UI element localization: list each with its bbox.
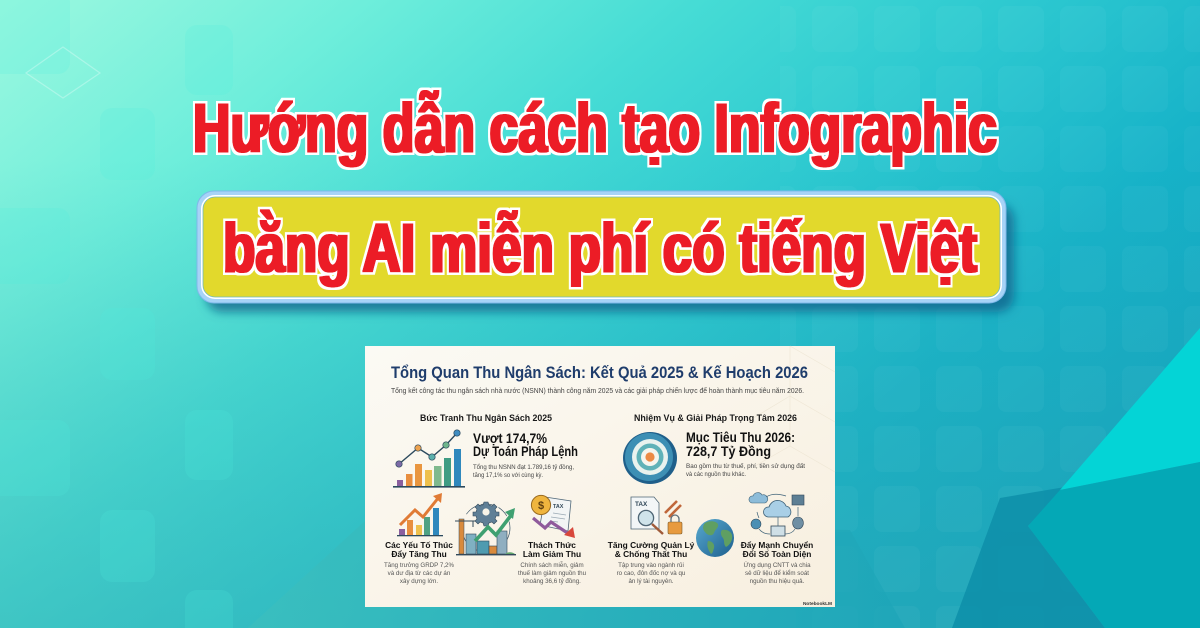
icon: tax document with falling arrow: $ [538, 500, 544, 512]
text block: tighter management [608, 540, 695, 585]
panel subtitle: Tổng kết công tác thu ngân sách nhà nước (NSNN) thành công năm 2025 và các giải pháp chiến lược để hoàn thành mục tiêu năm 2026. [391, 386, 804, 395]
text block: growth drivers: Tăng trưởng GRDP 7,2% [384, 562, 454, 569]
panel: infographic preview [365, 346, 835, 607]
text block: growth drivers: Đẩy Tăng Thu [391, 549, 447, 559]
text block: digital transformation [741, 540, 813, 585]
panel title: Tổng Quan Thu Ngân Sách: Kết Quả 2025 & Kế Hoạch 2026 [391, 363, 808, 382]
callout: 174,7%: tăng 17,1% so với cùng kỳ. [473, 472, 543, 479]
text block: growth drivers: xây dựng lớn. [400, 578, 438, 585]
icon: tax document with magnifier and lock: TAX [635, 501, 648, 508]
callout: 728,7 tỷ đồng: 728,7 Tỷ Đồng [686, 444, 771, 459]
callout: 728,7 tỷ đồng: và các nguồn thu khác. [686, 469, 746, 478]
callout: 728,7 tỷ đồng: Bao gồm thu từ thuế, phí, tiền sử dụng đất [686, 461, 805, 470]
text block: challenges: thuế làm giảm nguồn thu [518, 570, 587, 577]
column heading: 2025: Bức Tranh Thu Ngân Sách 2025 [420, 412, 552, 423]
column heading: 2026: Nhiệm Vụ & Giải Pháp Trọng Tâm 2026 [634, 412, 797, 423]
text block: digital transformation: Đổi Số Toàn Diện [743, 549, 811, 559]
text block: tighter management: Tăng Cường Quản Lý [608, 540, 695, 550]
callout: 174,7%: Vượt 174,7% [473, 431, 547, 446]
text block: digital transformation: Đẩy Mạnh Chuyển [741, 540, 813, 550]
text block: challenges: Thách Thức [528, 540, 576, 550]
text block: digital transformation: Ứng dụng CNTT và chia [743, 562, 811, 569]
text block: tighter management: & Chống Thất Thu [615, 549, 687, 559]
callout: 174,7% [473, 431, 578, 479]
icon: tax document with magnifier and lock [631, 497, 682, 534]
icon: globe [696, 519, 734, 557]
text block: challenges [518, 540, 587, 585]
highlighted heading box [197, 191, 1014, 312]
text block: tighter management: Tập trung vào ngành rủi [618, 562, 684, 569]
icon: city and growth arrow [455, 502, 516, 555]
icon: line and bar chart [393, 430, 465, 488]
heading line 2: bằng AI miễn phí có tiếng Việt [223, 209, 977, 287]
text block: growth drivers: và dư địa từ các dự án [388, 570, 451, 577]
icon: tax document with falling arrow [531, 495, 575, 538]
text block: challenges: khoảng 36,6 tỷ đồng. [523, 578, 581, 585]
text block: digital transformation: sẻ dữ liệu để kiểm soát [745, 570, 809, 577]
text block: tighter management: ro cao, đôn đốc nợ và qu [617, 570, 686, 577]
icon: target [623, 432, 677, 484]
text block: growth drivers: Các Yếu Tố Thúc [385, 540, 453, 550]
icon: cloud network [749, 493, 804, 536]
notebooklm mark: NotebookLM [803, 601, 832, 607]
callout: 174,7%: Dự Toán Pháp Lệnh [473, 444, 578, 459]
callout: 174,7%: Tổng thu NSNN đạt 1.789,16 tỷ đồng, [473, 462, 574, 471]
icon: tax document with falling arrow: TAX [553, 504, 564, 510]
text block: digital transformation: nguồn thu hiệu quả. [750, 578, 805, 585]
callout: 728,7 tỷ đồng: Mục Tiêu Thu 2026: [686, 430, 795, 445]
text block: challenges: Làm Giảm Thu [523, 549, 581, 559]
icon: growth bars with arrow [397, 493, 443, 536]
callout: 728,7 tỷ đồng [686, 430, 805, 478]
text block: tighter management: ản lý tài nguyên. [628, 578, 674, 585]
text block: growth drivers [384, 540, 454, 585]
text block: challenges: Chính sách miễn, giảm [520, 562, 584, 569]
